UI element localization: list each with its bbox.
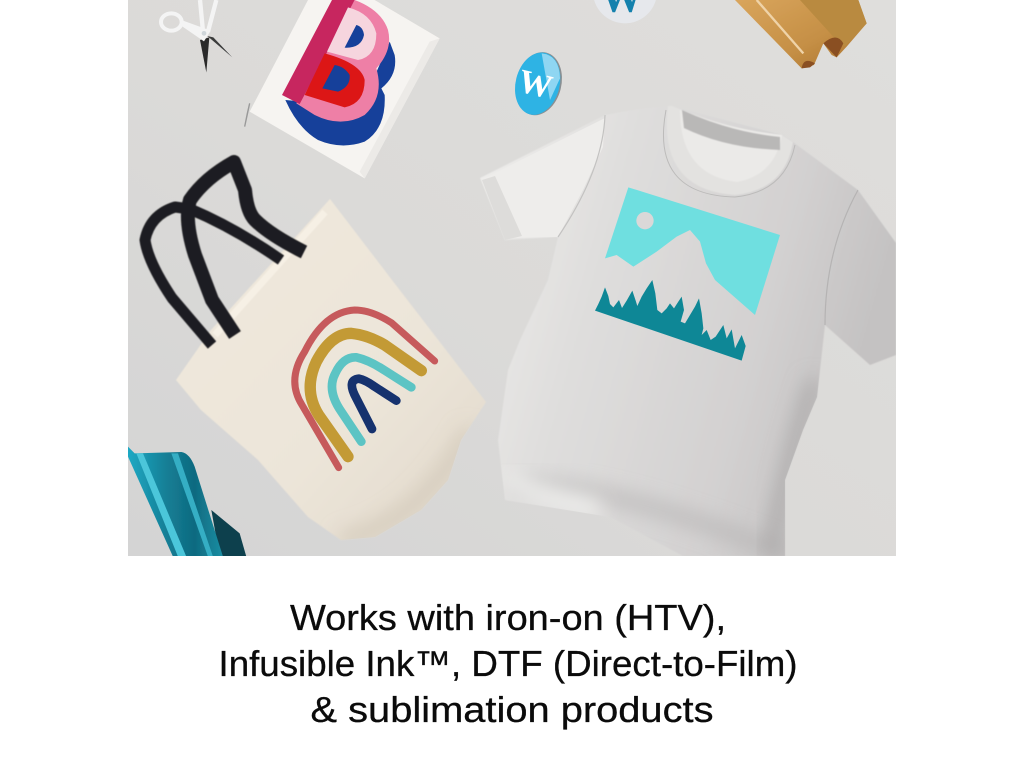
- letter B red bowl: [305, 53, 365, 107]
- rainbow print: [295, 310, 435, 468]
- mountain print sky: [605, 187, 780, 315]
- caption line 3: & sublimation products: [310, 689, 714, 730]
- gold glitter film: [735, 0, 867, 68]
- icon: scissors: [161, 0, 232, 72]
- letter B light bowl: [327, 7, 376, 60]
- front strap: [188, 162, 304, 335]
- tote bag: [176, 199, 486, 540]
- infographic canvas: [128, 0, 896, 730]
- shirt collar: [684, 136, 792, 194]
- caption line 2: Infusible Ink™, DTF (Direct-to-Film): [218, 643, 798, 684]
- letter B shadow: [285, 42, 395, 145]
- panel: product photo: [128, 0, 896, 557]
- caption heading: [218, 597, 798, 730]
- tote bag handles: [145, 162, 304, 345]
- letter B pink layer: [296, 0, 389, 122]
- sleeve highlight and folds: [540, 118, 604, 237]
- teal foil roll: [128, 447, 246, 557]
- letter B red band: [282, 0, 355, 104]
- caption line 1: Works with iron-on (HTV),: [290, 597, 726, 638]
- blue coin with W: [515, 52, 562, 116]
- back strap: [145, 207, 281, 345]
- t-shirt: [480, 106, 896, 556]
- print tree line: [595, 280, 746, 361]
- print moon: [636, 212, 654, 229]
- blue coin with W: W: [515, 62, 556, 106]
- pouch with letter B: [245, 0, 440, 178]
- white coin with W: [593, 0, 657, 23]
